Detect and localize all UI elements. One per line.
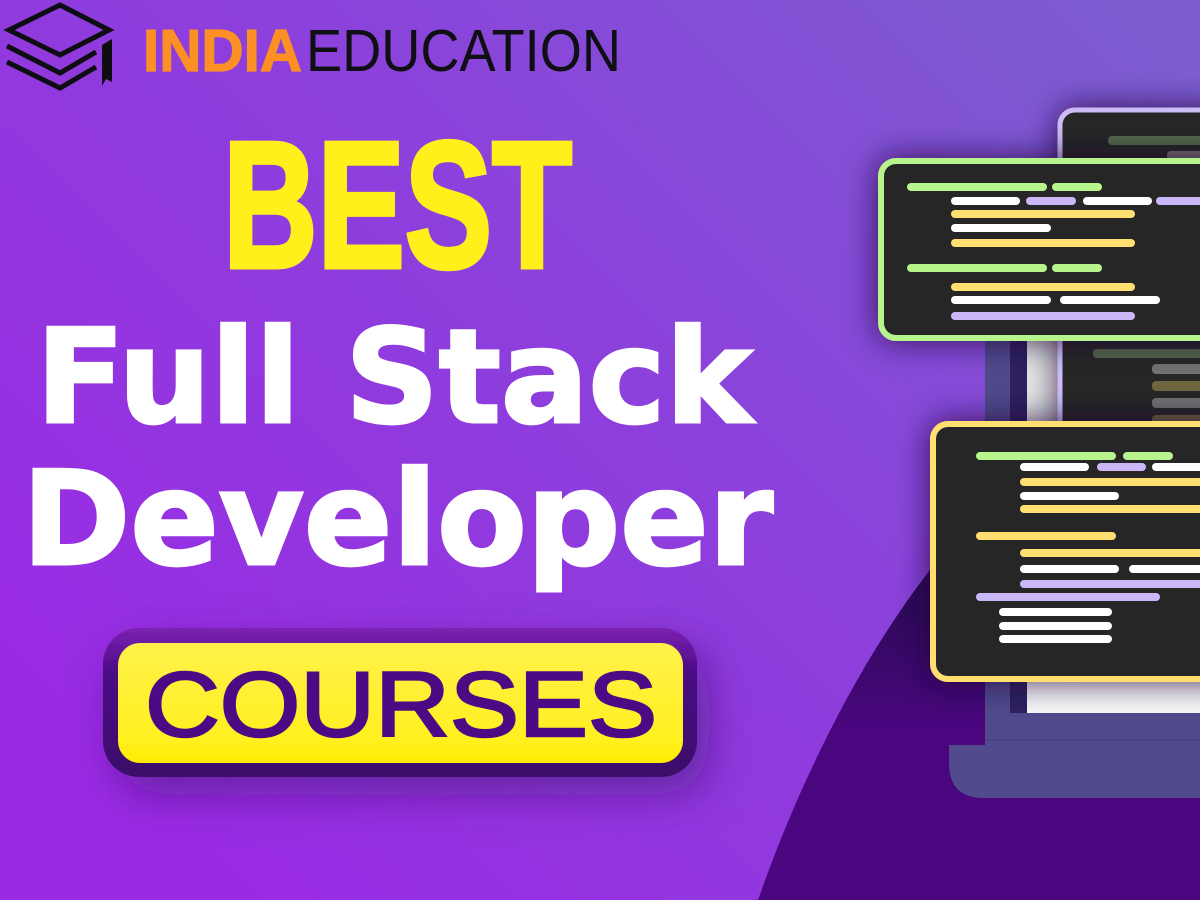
dark curved shape bbox=[758, 490, 1200, 900]
logo wordmark bbox=[143, 18, 621, 84]
laptop bbox=[949, 200, 1200, 798]
heading: Developer: Developer bbox=[22, 443, 773, 595]
logo wordmark: EDUCATION bbox=[306, 18, 621, 84]
button label: COURSES bbox=[145, 654, 657, 756]
logo wordmark: INDIA bbox=[143, 18, 302, 84]
courses button bbox=[103, 628, 697, 777]
back code window bbox=[1060, 110, 1200, 650]
green code card bbox=[881, 161, 1200, 338]
logo icon: graduation cap stack bbox=[7, 5, 112, 88]
heading: BEST: BEST bbox=[223, 105, 572, 306]
yellow code card bbox=[933, 424, 1200, 679]
heading: Full Stack: Full Stack bbox=[36, 301, 755, 453]
